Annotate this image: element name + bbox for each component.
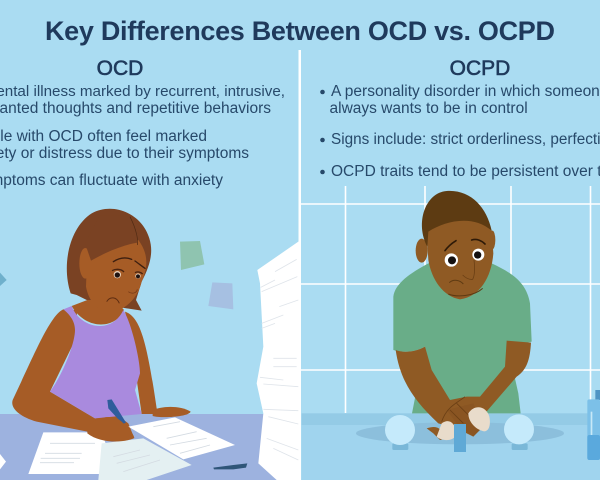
- divider: [298, 50, 301, 480]
- man: [393, 191, 532, 440]
- pen on desk: [213, 463, 247, 469]
- paper stack: [257, 242, 300, 480]
- soap foam: [437, 407, 490, 440]
- soap bottle: [587, 390, 600, 460]
- panel: OCPD text: [320, 57, 600, 180]
- OCPD bullet 1: [320, 83, 600, 117]
- faucet: [385, 414, 534, 452]
- papers: [28, 417, 235, 480]
- woman: [12, 209, 191, 441]
- illustration: woman at desk with paperwork: [0, 209, 300, 480]
- panel: OCPD tile wall: [301, 186, 600, 413]
- heading: OCPD: OCPD: [450, 57, 510, 80]
- sink basin: [356, 422, 564, 444]
- counter: [302, 413, 600, 480]
- illustration: man washing hands: [302, 191, 600, 480]
- sticky notes: [0, 241, 233, 309]
- title: Key Differences Between OCD vs. OCPD: [45, 16, 555, 46]
- heading: OCD: OCD: [97, 57, 143, 80]
- panel: OCD text: [0, 57, 285, 189]
- desk: [0, 414, 298, 480]
- writing hand and pen: [87, 399, 134, 442]
- OCPD bullet 1: always wants to be in control: [330, 100, 528, 117]
